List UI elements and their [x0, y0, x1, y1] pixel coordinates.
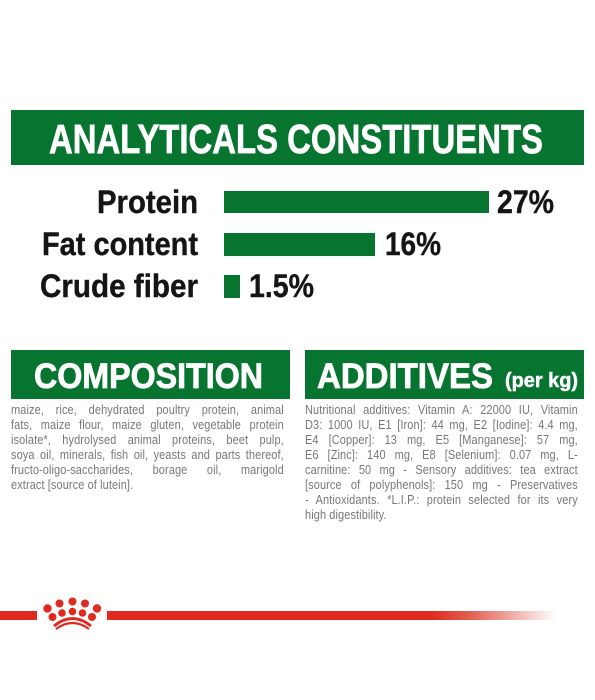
- heading: composition: COMPOSITION: [34, 357, 263, 396]
- heading: per kg: (per kg): [505, 370, 578, 392]
- icon: royal canin crown: [43, 598, 101, 629]
- row: crude fiber: Crude fiber: [40, 268, 198, 304]
- row: protein: 27%: [497, 184, 554, 220]
- row: protein: Protein: [97, 184, 198, 220]
- text block: composition: maize, rice, dehydrated poultry protein, animal: [11, 403, 284, 417]
- text block: composition: fats, maize flour, maize gluten, vegetable protein: [11, 418, 284, 432]
- panel: composition header: [11, 350, 290, 399]
- row: crude fiber: [40, 268, 314, 304]
- text block: additives: D3: 1000 IU, E1 [Iron]: 44 mg, E2 [Iodine]: 4.4 mg,: [305, 418, 578, 432]
- text block: additives: E6 [Zinc]: 140 mg, E8 [Selenium]: 0.07 mg, L-: [305, 448, 578, 462]
- row: fat content: Fat content: [42, 226, 198, 262]
- bar chart: nutrient percentages: [40, 184, 554, 304]
- text block: additives: Nutritional additives: Vitamin A: 22000 IU, Vitamin: [305, 403, 578, 417]
- text block: composition: soya oil, minerals, fish oil, yeasts and parts thereof,: [11, 448, 284, 462]
- panel: additives header: [305, 350, 584, 399]
- footer band: right red stripe fading out: [107, 611, 556, 620]
- row: protein: [97, 184, 554, 220]
- text block: additives: high digestibility.: [305, 508, 387, 522]
- text block: composition: fructo-oligo-saccharides, borage oil, marigold: [11, 463, 284, 477]
- text block: composition: isolate*, hydrolysed animal proteins, beet pulp,: [11, 433, 284, 447]
- panel: analyticals constituents header: [11, 110, 584, 165]
- text block: composition: [11, 403, 284, 492]
- text block: composition: extract [source of lutein].: [11, 478, 133, 492]
- row: fat content: 16%: [385, 226, 441, 262]
- text block: additives: - Antioxidants. *L.I.P.: protein selected for its very: [305, 493, 578, 507]
- text block: additives: E4 [Copper]: 13 mg, E5 [Manganese]: 57 mg,: [305, 433, 578, 447]
- row: crude fiber: 1.5%: [249, 268, 314, 304]
- heading: additives: ADDITIVES: [317, 357, 493, 396]
- row: fat content: [42, 226, 441, 262]
- text block: additives: [source of polyphenols]: 150 mg - Preservatives: [305, 478, 578, 492]
- footer band: left red stripe: [0, 611, 37, 620]
- text block: additives: [305, 403, 578, 522]
- text block: additives: carnitine: 50 mg - Sensory additives: tea extract: [305, 463, 578, 477]
